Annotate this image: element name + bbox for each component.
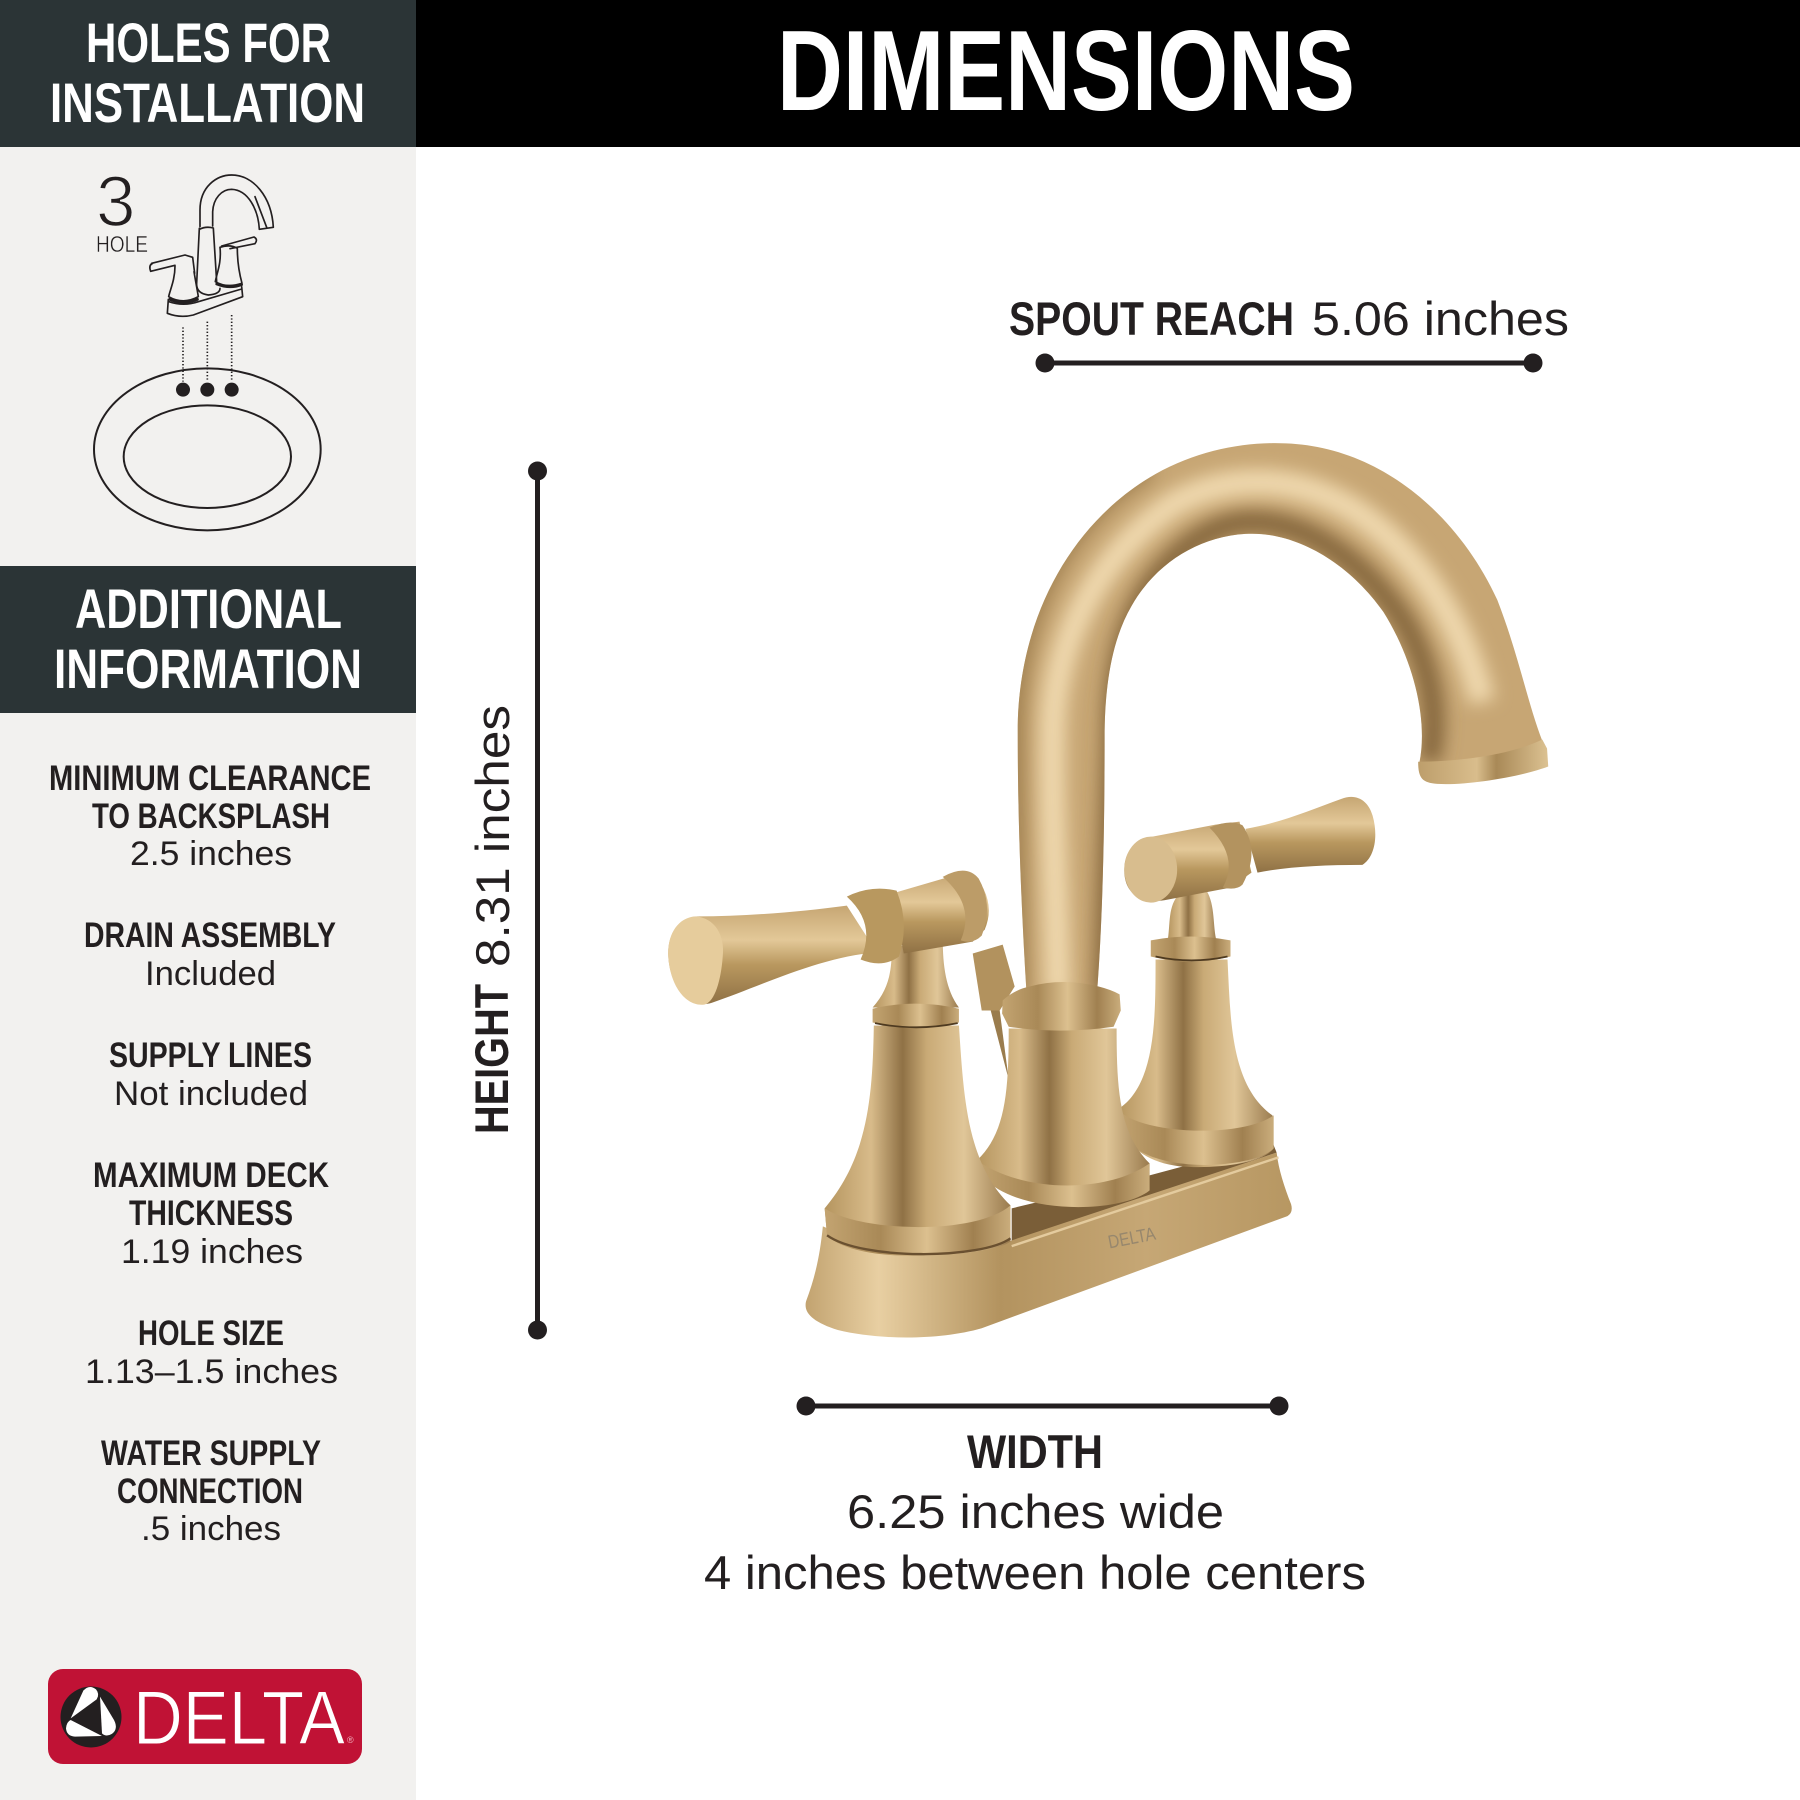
faucet spout xyxy=(1015,443,1542,996)
spec: water supply connection xyxy=(101,1434,321,1548)
spec: minimum clearance: TO BACKSPLASH xyxy=(92,797,330,836)
title banner: dimensions: DIMENSIONS xyxy=(777,8,1355,135)
spec: minimum clearance xyxy=(49,759,371,873)
faucet deck plate: DELTA xyxy=(1106,1223,1158,1252)
header: additional information: ADDITIONAL xyxy=(75,577,342,640)
faucet spout lip xyxy=(1418,740,1548,784)
icon: 3 hole sink diagram xyxy=(94,175,321,530)
faucet left handle xyxy=(668,871,1010,1256)
spec: water supply connection: .5 inches xyxy=(141,1510,281,1548)
dimension: height: HEIGHT xyxy=(465,984,518,1134)
faucet illustration xyxy=(668,443,1548,1337)
label: 3 hole: 3 xyxy=(96,163,136,242)
header: additional information: INFORMATION xyxy=(54,637,362,700)
header: holes for installation xyxy=(0,0,416,147)
header: additional information xyxy=(0,566,416,713)
spec: maximum deck thickness xyxy=(93,1156,329,1271)
faucet centre stem and pop-up lever xyxy=(973,945,1150,1207)
spec: water supply connection: CONNECTION xyxy=(117,1472,303,1511)
dimension: width xyxy=(704,1396,1366,1599)
dimension: spout reach xyxy=(1009,292,1569,372)
header: holes for installation: HOLES FOR xyxy=(86,11,331,74)
sidebar background xyxy=(0,0,416,1800)
label: 3 hole: HOLE xyxy=(96,231,148,257)
faucet collar xyxy=(1002,982,1121,1031)
label: 3 hole xyxy=(96,163,148,257)
header: holes for installation: INSTALLATION xyxy=(50,71,365,134)
spec: minimum clearance: MINIMUM CLEARANCE xyxy=(49,759,371,798)
faucet deck plate xyxy=(806,1142,1292,1337)
spec: water supply connection: WATER SUPPLY xyxy=(101,1434,321,1473)
spec: maximum deck thickness: THICKNESS xyxy=(129,1194,293,1233)
dimension: height xyxy=(465,462,547,1340)
dimension: width: WIDTH xyxy=(967,1425,1103,1478)
dimension: width: 6.25 inches wide xyxy=(847,1485,1224,1538)
spec: hole size: HOLE SIZE xyxy=(138,1314,284,1353)
spec: supply lines xyxy=(109,1036,312,1113)
spec: supply lines: Not included xyxy=(114,1075,308,1113)
logo: delta: ® xyxy=(347,1735,354,1745)
dimension: width: 4 inches between hole centers xyxy=(704,1546,1366,1599)
dimension: spout reach: 5.06 inches xyxy=(1312,292,1569,345)
spec: minimum clearance: 2.5 inches xyxy=(130,835,292,873)
spec: maximum deck thickness: MAXIMUM DECK xyxy=(93,1156,329,1195)
faucet right handle xyxy=(1118,797,1375,1167)
dimension: height: 8.31 inches xyxy=(466,705,519,967)
spec: maximum deck thickness: 1.19 inches xyxy=(121,1233,303,1271)
spec: hole size: 1.13–1.5 inches xyxy=(85,1353,338,1391)
spec: hole size xyxy=(85,1314,338,1391)
spec: drain assembly: Included xyxy=(145,955,276,993)
dimension: spout reach: SPOUT REACH xyxy=(1009,292,1294,345)
spec: supply lines: SUPPLY LINES xyxy=(109,1036,312,1075)
spec: drain assembly xyxy=(84,916,336,993)
title banner: dimensions xyxy=(416,0,1800,147)
spec: drain assembly: DRAIN ASSEMBLY xyxy=(84,916,336,955)
logo: delta: DELTA xyxy=(133,1676,345,1761)
logo: delta xyxy=(48,1669,362,1764)
